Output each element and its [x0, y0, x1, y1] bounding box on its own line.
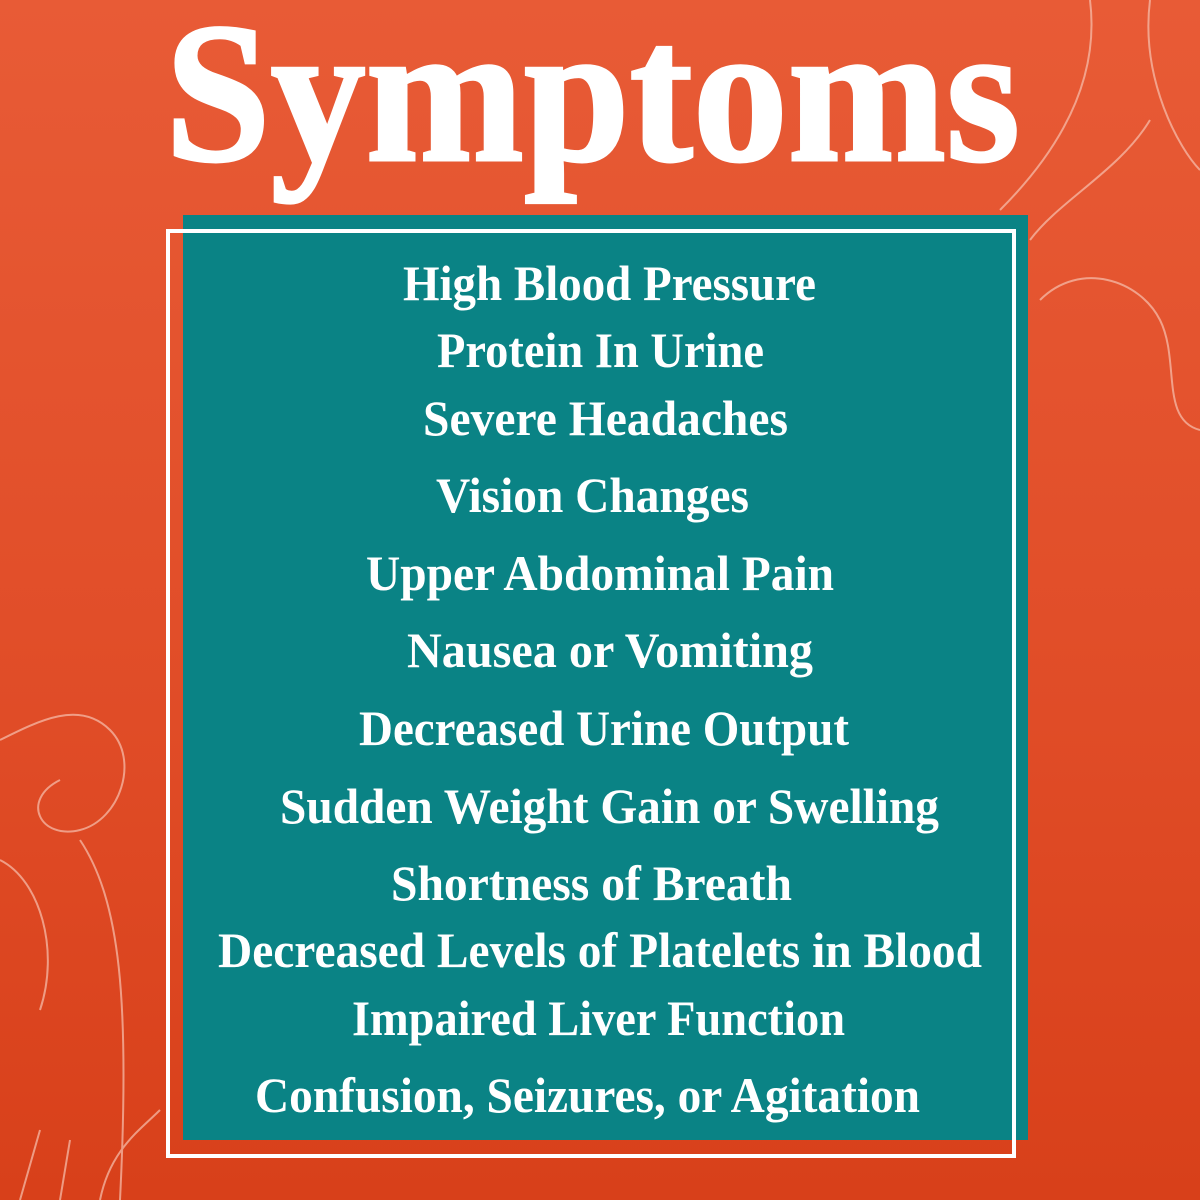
white outline frame — [168, 231, 1014, 1156]
symptoms list: Vision Changes — [436, 467, 749, 523]
teal panel — [183, 215, 1028, 1140]
symptoms list: Impaired Liver Function — [352, 990, 845, 1046]
symptoms list: Upper Abdominal Pain — [366, 545, 834, 601]
symptoms list: High Blood Pressure — [403, 255, 816, 311]
symptoms list: Decreased Urine Output — [359, 700, 849, 756]
symptoms list: Shortness of Breath — [391, 855, 792, 911]
symptoms list: Sudden Weight Gain or Swelling — [280, 778, 939, 834]
symptoms list — [218, 255, 982, 1123]
symptoms list: Protein In Urine — [437, 322, 764, 378]
symptoms list: Nausea or Vomiting — [407, 622, 813, 678]
symptoms list: Decreased Levels of Platelets in Blood — [218, 922, 982, 978]
symptoms list: Confusion, Seizures, or Agitation — [255, 1067, 920, 1123]
symptoms list: Severe Headaches — [423, 390, 788, 446]
